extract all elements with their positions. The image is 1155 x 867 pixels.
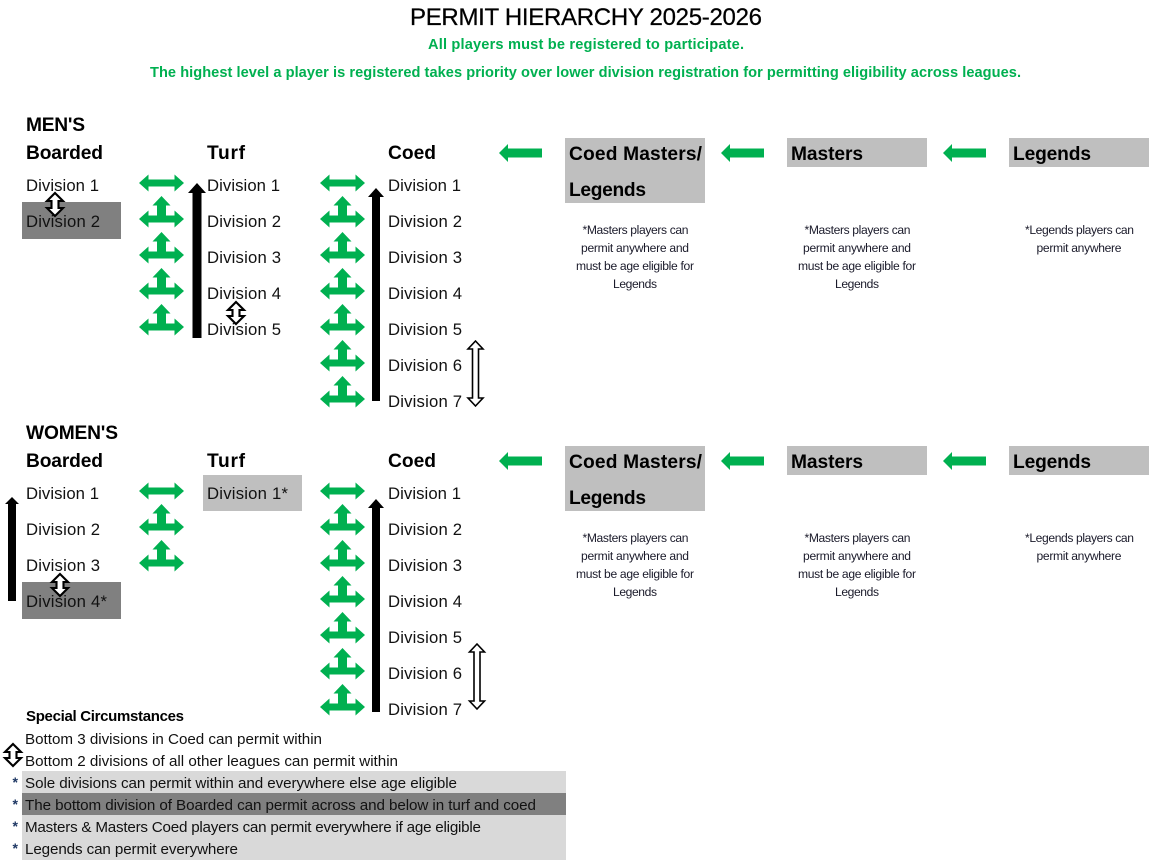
column: men's turf: Division 4 [207, 284, 281, 303]
box: masters: Masters [791, 144, 863, 165]
note: coed masters: must be age eligible for [576, 259, 694, 273]
legend text: masters players: * [12, 818, 18, 834]
box: coed masters/legends: Coed Masters/ [569, 144, 703, 165]
green arrows pointing left [499, 144, 986, 162]
legend text: bottom 2 divisions: Bottom 2 divisions of all other leagues can permit within [25, 753, 398, 770]
column: men's coed: Division 7 [388, 392, 462, 411]
heading: women's: WOMEN'S [26, 423, 118, 444]
black up arrow: coed [368, 499, 384, 712]
column: men's turf: Division 2 [207, 212, 281, 231]
box: masters: Masters [791, 452, 863, 473]
note: masters [798, 531, 916, 599]
note: masters: permit anywhere and [803, 241, 911, 255]
box: coed masters/legends [565, 446, 705, 511]
column: men's coed [388, 143, 462, 411]
column: women's boarded: Division 3 [26, 556, 100, 575]
note: legends [1025, 531, 1134, 563]
column: women's boarded: Division 2 [26, 520, 100, 539]
column: women's turf: Turf [207, 451, 246, 472]
column: men's coed: Division 6 [388, 356, 462, 375]
note: legends: *Legends players can [1025, 531, 1134, 545]
panel: men's hierarchy [22, 115, 483, 411]
column: women's boarded: Division 1 [26, 484, 99, 503]
column: men's boarded: Boarded [26, 143, 103, 164]
green permit arrows: boarded to turf [139, 174, 184, 336]
column: men's turf [207, 143, 281, 339]
legend text: legends players: Legends can permit everywhere [25, 841, 238, 858]
legend text: sole divisions: Sole divisions can permit within and everywhere else age eligible [25, 775, 457, 792]
note: coed masters: permit anywhere and [581, 241, 689, 255]
column: men's boarded: Division 2 [26, 212, 100, 231]
note: masters: *Masters players can [804, 531, 910, 545]
note: masters: *Masters players can [804, 223, 910, 237]
note: masters: must be age eligible for [798, 567, 916, 581]
note: legends: *Legends players can [1025, 223, 1134, 237]
legend text: masters players: Masters & Masters Coed players can permit everywhere if age eligible [25, 819, 481, 836]
column: women's boarded [22, 451, 121, 619]
box: legends [1009, 138, 1149, 167]
note: coed masters: permit anywhere and [581, 549, 689, 563]
green permit arrows: boarded to turf [139, 482, 184, 572]
column: men's coed: Division 4 [388, 284, 462, 303]
note: masters: Legends [835, 277, 879, 291]
note: masters: Legends [835, 585, 879, 599]
column: women's coed: Division 1 [388, 484, 461, 503]
note: masters: must be age eligible for [798, 259, 916, 273]
subtitle: registration requirement: All players must be registered to participate. [428, 37, 744, 53]
note: coed masters: must be age eligible for [576, 567, 694, 581]
legend text: bottom division of boarded: * [12, 796, 18, 812]
column: men's coed: Division 5 [388, 320, 462, 339]
note: legends [1025, 223, 1134, 255]
legend text: sole divisions: * [12, 774, 18, 790]
panel: women's masters and legends [499, 446, 1149, 599]
note: coed masters: *Masters players can [582, 531, 688, 545]
black up arrow: boarded [5, 497, 19, 601]
column: women's turf [203, 451, 302, 511]
column: women's coed: Division 2 [388, 520, 462, 539]
box: masters [787, 138, 927, 167]
green permit arrows: turf to coed [320, 174, 365, 408]
box: legends: Legends [1013, 452, 1091, 473]
column: women's coed: Coed [388, 451, 436, 472]
note: masters [798, 223, 916, 291]
box: coed masters/legends: Legends [569, 488, 646, 509]
column: women's coed: Division 3 [388, 556, 462, 575]
note: coed masters [576, 223, 694, 291]
note: coed masters: Legends [613, 277, 657, 291]
panel: special circumstances legend [5, 708, 566, 860]
white double arrow: boarded [52, 574, 68, 596]
legend text: bottom 3 divisions: Bottom 3 divisions in Coed can permit within [25, 731, 322, 748]
black up arrow: coed [368, 188, 384, 401]
column: women's coed: Division 4 [388, 592, 462, 611]
column: men's turf: Turf [207, 143, 246, 164]
green permit arrows: turf to coed [320, 482, 365, 716]
legend text: legends players: * [12, 840, 18, 856]
column: men's boarded: Division 1 [26, 176, 99, 195]
white double arrow: coed [470, 644, 484, 709]
white double arrow: coed [468, 341, 483, 406]
panel: men's masters and legends [499, 138, 1149, 291]
column: women's boarded: Boarded [26, 451, 103, 472]
box: coed masters/legends [565, 138, 705, 203]
legend row backgrounds [22, 771, 566, 860]
subtitle: priority rule: The highest level a player is registered takes priority over lower division registration for permitting eligibility across leagues. [150, 65, 1021, 81]
column: men's turf: Division 5 [207, 320, 281, 339]
column: women's boarded: Division 4* [26, 592, 108, 611]
column: men's turf: Division 3 [207, 248, 281, 267]
column: men's coed: Division 3 [388, 248, 462, 267]
heading: men's: MEN'S [26, 115, 85, 136]
heading: special circumstances: Special Circumstances [26, 708, 184, 725]
note: coed masters: *Masters players can [582, 223, 688, 237]
column: men's turf: Division 1 [207, 176, 280, 195]
box: coed masters/legends: Legends [569, 180, 646, 201]
column: women's coed: Division 6 [388, 664, 462, 683]
box: masters [787, 446, 927, 475]
white double arrow: turf [228, 302, 244, 324]
note: coed masters: Legends [613, 585, 657, 599]
box: legends [1009, 446, 1149, 475]
icon: white double arrow [5, 744, 21, 766]
box: legends: Legends [1013, 144, 1091, 165]
note: masters: permit anywhere and [803, 549, 911, 563]
note: legends: permit anywhere [1036, 241, 1122, 255]
column: women's coed: Division 7 [388, 700, 462, 719]
black up arrow: turf [188, 183, 206, 338]
column: men's boarded [22, 143, 121, 239]
title: PERMIT HIERARCHY 2025-2026 [410, 4, 762, 31]
note: legends: permit anywhere [1036, 549, 1122, 563]
column: men's coed: Coed [388, 143, 436, 164]
green arrows pointing left [499, 452, 986, 470]
column: men's coed: Division 1 [388, 176, 461, 195]
column: women's coed: Division 5 [388, 628, 462, 647]
box: coed masters/legends: Coed Masters/ [569, 452, 703, 473]
column: women's turf: Division 1* [207, 484, 288, 503]
legend text: bottom division of boarded: The bottom division of Boarded can permit across and below in turf and coed [25, 797, 536, 814]
column: men's coed: Division 2 [388, 212, 462, 231]
white double arrow: boarded [47, 193, 63, 216]
note: coed masters [576, 531, 694, 599]
column: women's coed [388, 451, 462, 719]
panel: women's hierarchy [5, 423, 484, 719]
